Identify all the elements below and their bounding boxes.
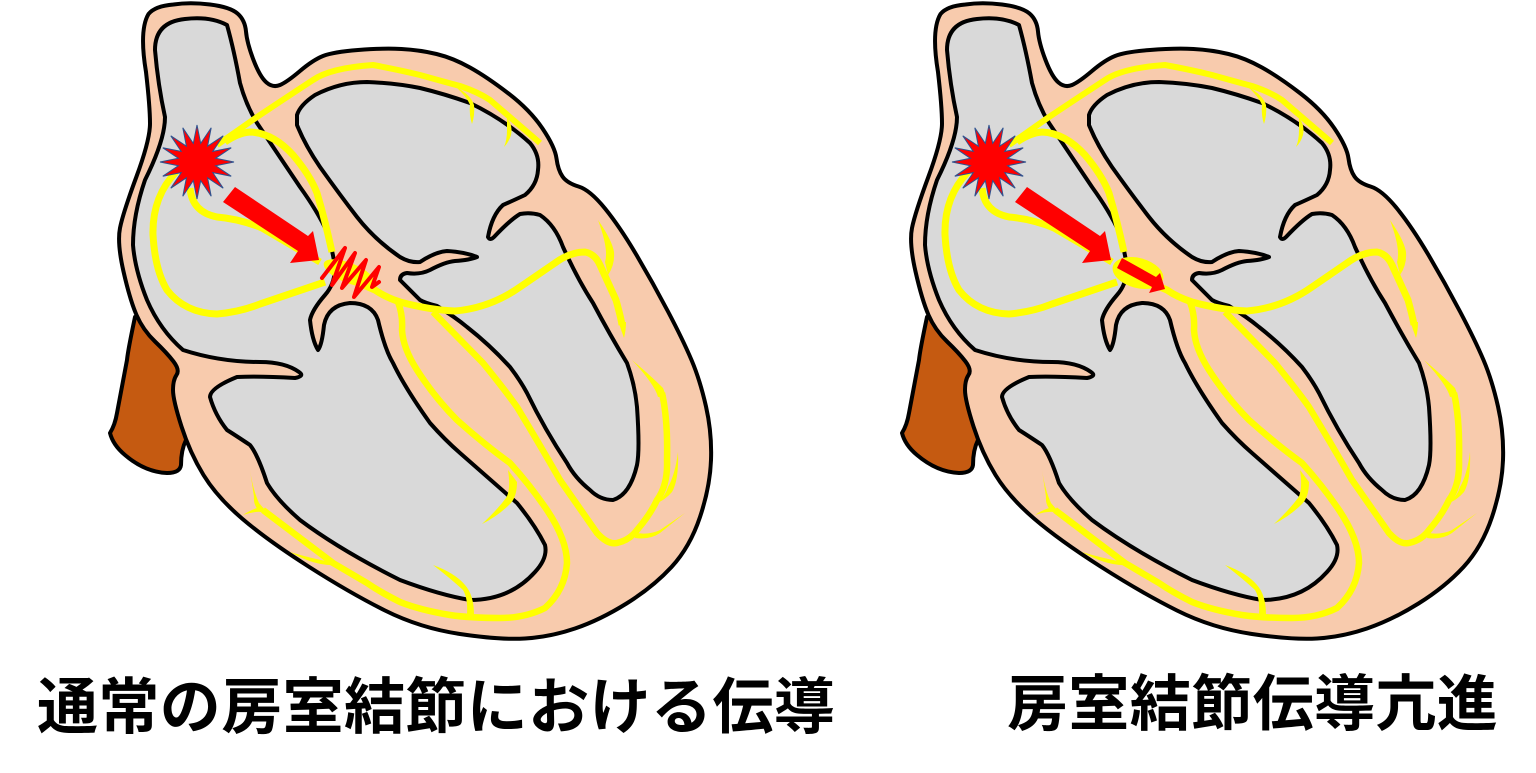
AV node	[320, 254, 378, 292]
heart muscle wall	[119, 3, 711, 639]
heart diagram: enhanced AV node conduction	[902, 3, 1503, 639]
heart muscle wall	[911, 3, 1503, 639]
conduction pathways	[945, 65, 1477, 618]
arrow: sinus node to AV node	[1015, 187, 1111, 263]
conduction pathways	[153, 65, 685, 618]
title: enhanced AV node conduction: 房室結節伝導亢進	[1007, 670, 1498, 738]
title: normal AV node conduction: 通常の房室結節における伝導	[37, 673, 835, 741]
inferior vena cava	[110, 317, 195, 473]
arrow: fast conduction through AV node	[1117, 258, 1165, 293]
slowed conduction zigzag in AV node	[322, 248, 379, 297]
AV node	[1109, 252, 1167, 294]
heart diagram: normal AV node conduction	[110, 3, 711, 639]
right atrium and right ventricle	[925, 18, 1338, 600]
icon: sinus node burst	[952, 125, 1026, 199]
inferior vena cava	[902, 317, 987, 473]
left atrium and left ventricle	[297, 82, 638, 500]
arrow: sinus node to AV node	[223, 187, 319, 263]
right atrium and right ventricle	[133, 18, 546, 600]
left atrium and left ventricle	[1089, 82, 1430, 500]
icon: sinus node burst	[160, 125, 234, 199]
